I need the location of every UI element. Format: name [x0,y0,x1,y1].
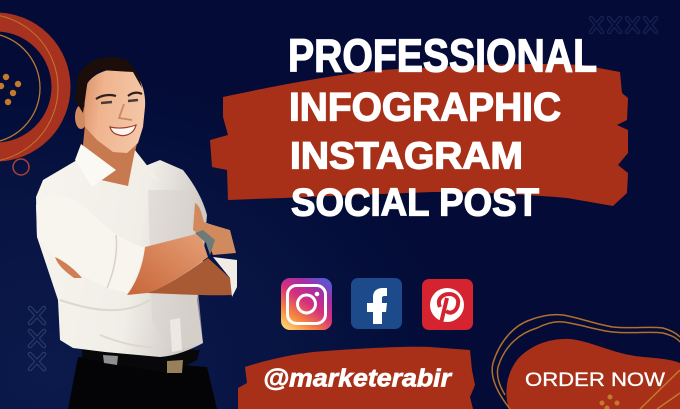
title: INFOGRAPHIC [289,86,561,130]
trousers [68,357,217,409]
title: INSTAGRAM [290,136,523,178]
hand on arm [193,203,236,255]
person [36,57,237,409]
title: SOCIAL POST [291,182,539,224]
title [288,30,597,224]
collar [75,144,116,187]
title: PROFESSIONAL [288,30,597,82]
mouth [110,125,136,136]
pinterest icon [422,279,473,330]
neck [83,125,140,190]
belt [82,348,200,374]
shirt body [36,160,207,357]
decorative ring top left [0,14,61,175]
upper sleeve [36,195,145,293]
instagram icon [281,278,332,330]
order now blob: ORDER NOW [525,369,666,391]
x pattern top right [591,18,656,32]
forearm [127,233,208,295]
handle brush badge: @marketerabir [263,364,452,392]
back arm with cuff [147,258,232,295]
order now blob [492,315,680,409]
handle brush badge [238,347,475,409]
hidden hand [55,257,82,278]
ear [75,105,87,129]
hair [75,57,142,113]
brush stroke banner behind title [210,64,628,206]
head [84,69,145,153]
x pattern left [30,308,44,369]
facebook icon [351,278,402,329]
eyes and brows [96,93,142,120]
watch [195,230,215,255]
